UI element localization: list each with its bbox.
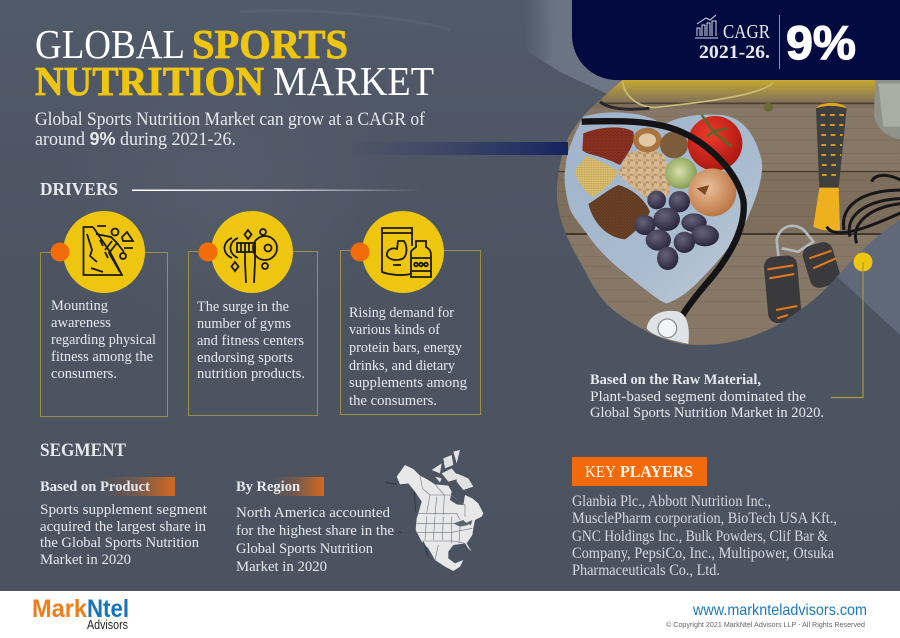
brussels sprout	[665, 158, 697, 189]
photo: healthy food on a heart plate with fitness gear	[550, 78, 900, 355]
driver 2 text: and fitness centers	[197, 333, 304, 349]
driver 1 text: consumers.	[51, 366, 117, 382]
driver 2 text	[197, 299, 305, 382]
segment: by region: Global Sports Nutrition	[236, 541, 373, 557]
segment: based on product: the Global Sports Nutrition	[40, 535, 199, 551]
segment: by region: By Region	[236, 479, 300, 495]
callout: raw material: Global Sports Nutrition Market in 2020.	[590, 405, 824, 421]
heading: drivers: DRIVERS	[40, 179, 118, 199]
panel: driver 3	[340, 211, 480, 414]
key players list	[572, 493, 837, 579]
footer	[0, 591, 900, 638]
driver 1 text: awareness	[51, 315, 111, 331]
heading: key players: KEY	[585, 462, 616, 481]
driver 3 text: Rising demand for	[349, 305, 454, 321]
segment: based on product: acquired the largest share in	[40, 519, 206, 535]
subtitle	[35, 110, 426, 150]
segment: based on product: Sports supplement segment	[40, 502, 208, 518]
CAGR badge: 9%	[786, 16, 856, 69]
logo: MarkNtel Advisors: Advisors	[87, 618, 128, 632]
title: MARKET	[273, 58, 434, 104]
driver 2 text: nutrition products.	[197, 366, 305, 382]
segment: based on product: Market in 2020	[40, 552, 131, 568]
rope	[827, 175, 900, 243]
key players list: GNC Holdings Inc., Bulk Powders, Clif Bar &	[572, 528, 828, 545]
heading: key players: PLAYERS	[620, 462, 693, 481]
key players list: Company, PepsiCo, Inc., Multipower, Otsuka	[572, 545, 834, 562]
CAGR badge	[572, 0, 900, 80]
CAGR badge: CAGR	[723, 22, 770, 43]
segment: by region: North America accounted	[236, 505, 390, 521]
heart plate	[565, 112, 762, 303]
heading: segment: SEGMENT	[40, 440, 126, 461]
title: NUTRITION	[35, 58, 264, 104]
driver 3 text: protein bars, energy	[349, 340, 462, 356]
key players list: Glanbia Plc., Abbott Nutrition Inc.,	[572, 493, 771, 510]
heading: key players	[572, 457, 707, 486]
driver 1 text: Mounting	[51, 298, 108, 314]
icon: hand lifting dumbbell	[224, 229, 277, 283]
website and copyright	[666, 602, 867, 629]
sneaker	[874, 80, 900, 140]
website and copyright: © Copyright 2021 MarkNtel Advisors LLP - All Rights Reserved	[666, 620, 865, 629]
tomato	[688, 116, 742, 171]
subtitle: Global Sports Nutrition Market can grow at a CAGR of	[35, 110, 426, 130]
segment: based on product: Based on Product	[40, 479, 150, 495]
hand grip	[777, 226, 813, 256]
logo: MarkNtel Advisors: Mark	[32, 595, 87, 623]
logo: MarkNtel Advisors: Ntel	[87, 595, 129, 623]
callout: raw material: Plant-based segment dominated the	[590, 389, 806, 405]
grapes	[634, 191, 719, 270]
title: GLOBAL	[35, 21, 185, 67]
segment: by region: Market in 2020	[236, 559, 327, 575]
CAGR badge: 2021-26.	[699, 42, 770, 63]
panel: driver 1	[40, 211, 168, 416]
callout: raw material: Based on the Raw Material,	[590, 372, 761, 388]
icon: rock climber	[84, 226, 133, 275]
driver 1 text: regarding physical	[51, 332, 156, 348]
panel: driver 2	[188, 211, 318, 416]
navy bar behind subtitle	[350, 142, 568, 155]
driver 3 text: supplements among	[349, 375, 467, 391]
earphone cord	[623, 82, 773, 107]
jump rope handle	[816, 103, 847, 188]
driver 3 text: the consumers.	[349, 393, 437, 409]
key players list: MusclePharm corporation, BioTech USA Kft.,	[572, 510, 837, 527]
driver 1 text: fitness among the	[51, 349, 153, 365]
segment: by region: for the highest share in the	[236, 523, 394, 539]
onion	[688, 168, 736, 216]
logo: MarkNtel Advisors	[32, 595, 129, 632]
website and copyright: www.marknteladvisors.com	[692, 602, 867, 619]
callout connector	[831, 252, 872, 398]
title	[35, 21, 434, 104]
driver 3 text: various kinds of	[349, 322, 440, 338]
grains	[582, 127, 634, 165]
title: SPORTS	[192, 21, 348, 67]
driver 2 text: The surge in the	[197, 299, 289, 315]
segment: based on product	[40, 477, 208, 568]
segment: by region	[236, 477, 394, 575]
driver 1 text	[51, 298, 156, 382]
map: North America	[385, 450, 483, 571]
icon: protein pouch and bottle	[382, 228, 431, 277]
stethoscope	[582, 121, 744, 317]
driver 3 text: drinks, and dietary	[349, 358, 455, 374]
key players list: Pharmaceuticals Co., Ltd.	[572, 562, 720, 579]
driver 3 text	[349, 305, 467, 409]
driver 2 text: number of gyms	[197, 316, 291, 332]
subtitle: around 9% during 2021-26.	[35, 128, 236, 150]
walnut and nut	[633, 128, 662, 152]
icon: growth chart	[695, 15, 718, 38]
callout: raw material	[590, 372, 824, 421]
driver 2 text: endorsing sports	[197, 350, 293, 366]
